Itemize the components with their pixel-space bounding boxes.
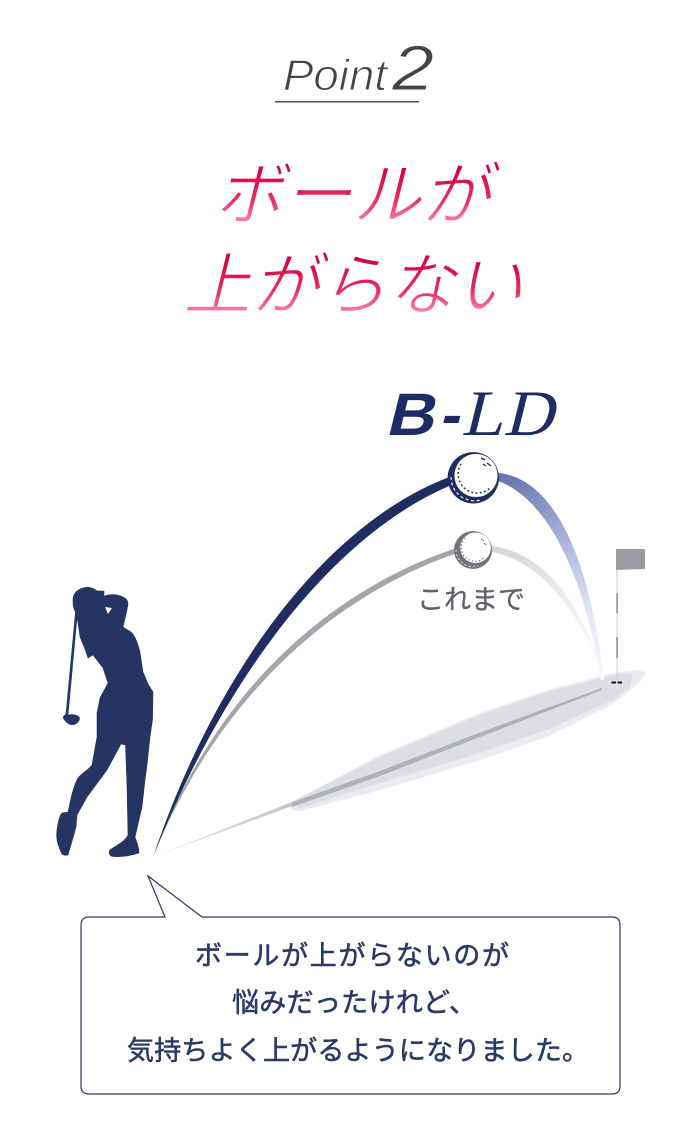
bubble text: ボールが上がらないのが	[195, 941, 509, 971]
heading: Point 2	[275, 32, 434, 104]
label: これまで: これまで	[417, 585, 525, 615]
logo: B-LD: -	[435, 381, 472, 448]
title: ボールが 上がらない	[179, 157, 538, 324]
trajectory: B-LD ball	[153, 473, 604, 857]
ground shadow	[153, 670, 645, 857]
speech bubble	[81, 876, 620, 1094]
title: ボールが 上がらない: ボールが	[210, 157, 505, 234]
golf ball: previous	[454, 531, 492, 569]
logo: B-LD	[382, 378, 567, 450]
logo: B-LD: B	[382, 381, 447, 448]
flag	[612, 549, 645, 684]
golf ball: B-LD	[448, 452, 499, 503]
golfer silhouette	[57, 587, 153, 857]
title: ボールが 上がらない: 上がらない	[179, 247, 538, 324]
bubble text: 気持ちよく上がるようになりました。	[127, 1036, 589, 1066]
logo: B-LD: LD	[457, 378, 567, 450]
heading: Point 2: Point	[283, 51, 389, 100]
bubble text	[127, 941, 589, 1066]
bubble text: 悩みだったけれど、	[232, 988, 476, 1018]
heading: Point 2: 2	[391, 32, 434, 104]
trajectory: previous ball	[153, 546, 602, 857]
